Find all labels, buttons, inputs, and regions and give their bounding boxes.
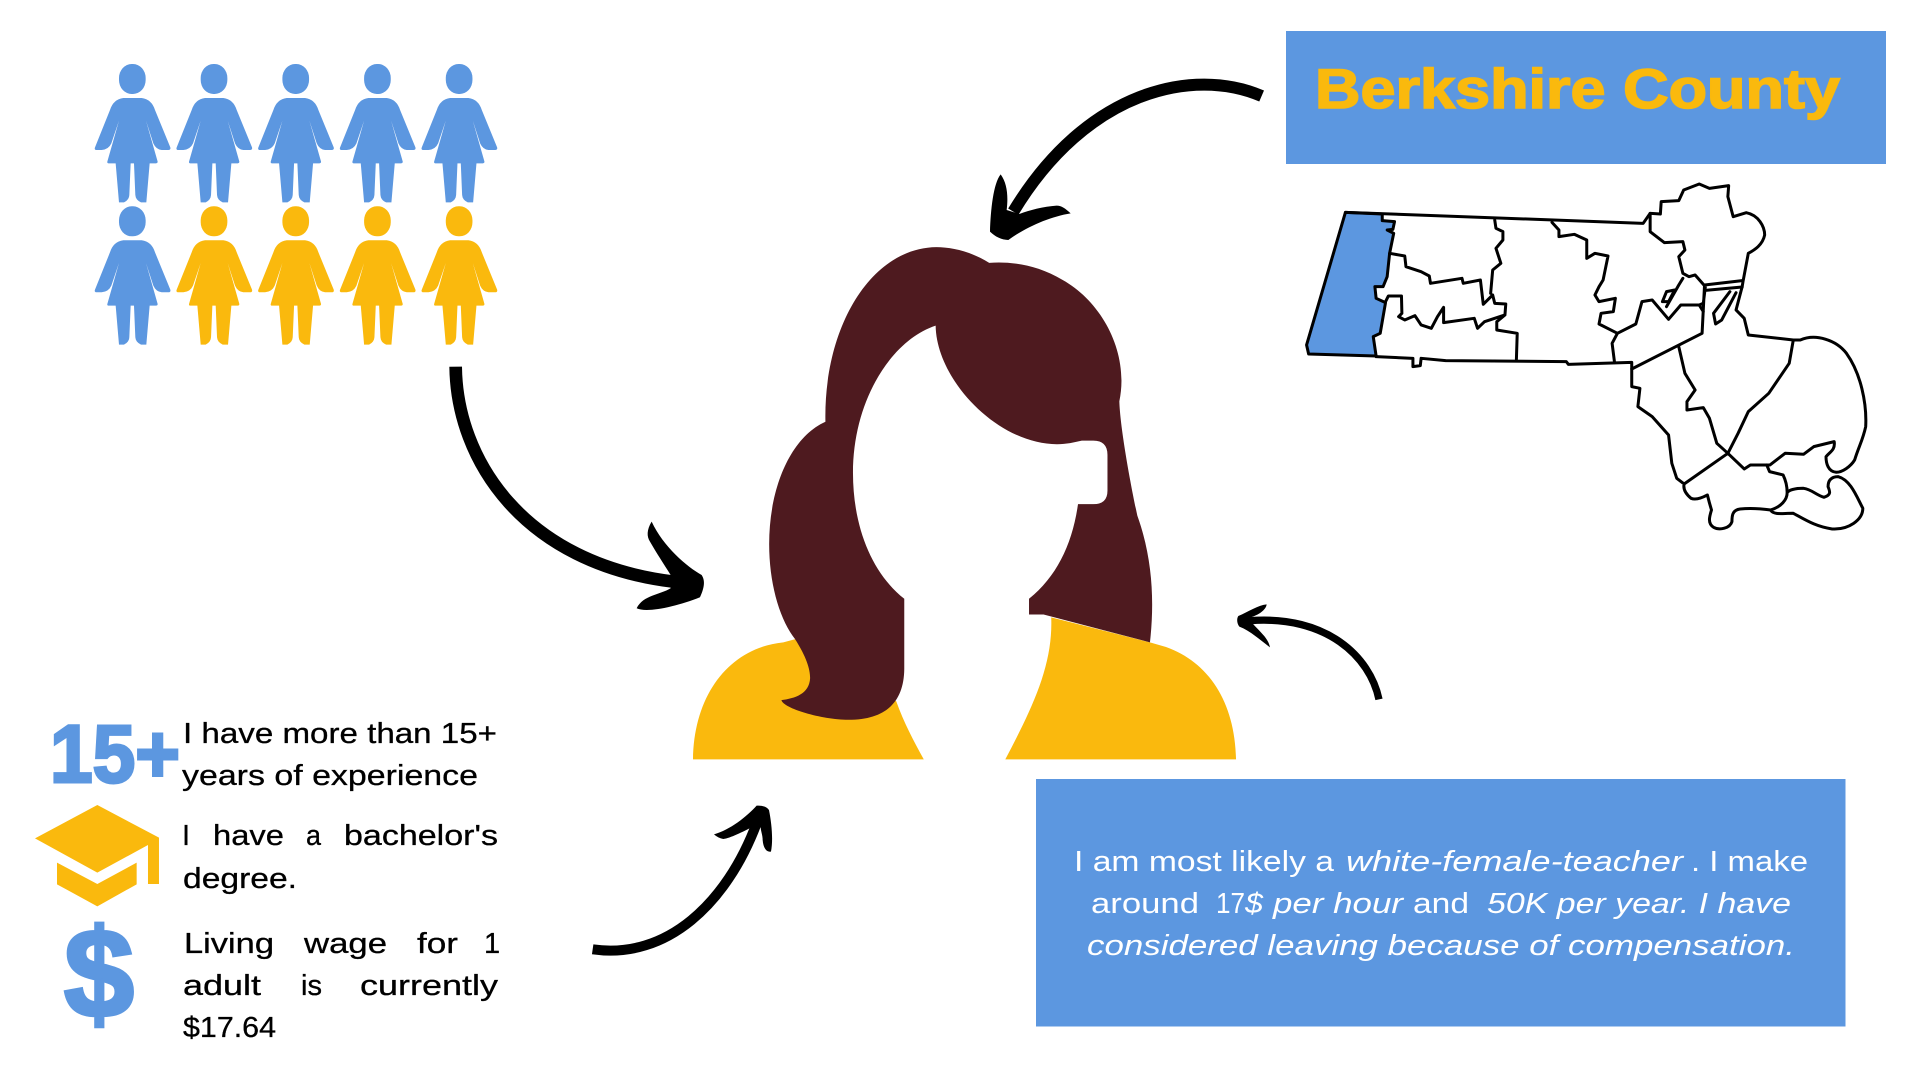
degree text — [182, 820, 498, 895]
heading: Berkshire County — [1315, 57, 1840, 120]
person 10 yellow — [422, 206, 497, 345]
experience text: years of experience — [182, 760, 478, 792]
description text: . I make — [1691, 846, 1808, 878]
map of Massachusetts counties with Berkshire highlighted — [1307, 184, 1866, 529]
county borders — [1386, 213, 1793, 453]
person 2 blue — [176, 64, 252, 202]
Berkshire County highlight — [1307, 212, 1395, 356]
person 4 blue — [340, 64, 416, 202]
description text: I am most likely a — [1074, 846, 1335, 878]
big number: 15+ — [50, 709, 180, 800]
living wage text: wage — [303, 928, 387, 960]
person 6 blue — [95, 206, 170, 345]
pictogram: ten women, six blue and four yellow — [95, 64, 497, 345]
degree text: I — [182, 820, 190, 852]
description text: 17 — [1216, 888, 1245, 920]
arrow: description to woman — [1237, 604, 1379, 699]
shoulder left — [693, 639, 924, 759]
description text — [1074, 846, 1808, 962]
stat: living wage — [64, 903, 500, 1044]
arrow: stats to woman — [593, 806, 772, 951]
person 8 yellow — [258, 206, 334, 345]
description text: around — [1091, 888, 1199, 920]
icon: dollar sign: $ — [64, 903, 134, 1044]
degree text: degree. — [183, 863, 297, 895]
person 7 yellow — [176, 206, 252, 345]
person 1 blue — [95, 64, 170, 202]
description text: per hour — [1272, 888, 1405, 920]
living wage text: adult — [183, 970, 261, 1002]
person 5 blue — [422, 64, 497, 202]
degree text: have — [213, 820, 284, 852]
living wage text: is — [301, 970, 322, 1002]
living wage text: 1 — [484, 928, 500, 960]
description text: 50K per year. I have — [1487, 888, 1791, 920]
living wage text: $17.64 — [183, 1012, 276, 1044]
description text: white-female-teacher — [1346, 846, 1685, 878]
person 9 yellow — [340, 206, 416, 345]
state outline — [1345, 184, 1866, 529]
arrow: Berkshire County to woman — [990, 85, 1262, 240]
panel: Berkshire County title — [1286, 31, 1886, 164]
degree text: bachelor's — [344, 820, 498, 852]
living wage text: Living — [184, 928, 274, 960]
panel: description — [1036, 779, 1846, 1026]
experience text — [182, 718, 497, 792]
stat: 15+ years of experience — [50, 709, 497, 800]
living wage text — [183, 928, 500, 1044]
description text: considered leaving because of compensation. — [1087, 930, 1795, 962]
hair — [769, 247, 1152, 720]
stat: bachelor's degree — [35, 805, 498, 906]
woman silhouette — [693, 247, 1236, 759]
arrow: pictogram to woman — [456, 367, 704, 610]
degree text: a — [306, 820, 322, 852]
living wage text: currently — [360, 970, 499, 1002]
description text: and — [1413, 888, 1469, 920]
experience text: I have more than 15+ — [183, 718, 497, 750]
description text: $ — [1244, 888, 1264, 920]
person 3 blue — [258, 64, 334, 202]
icon: graduation cap — [35, 805, 159, 906]
living wage text: for — [417, 928, 458, 960]
shoulder right — [1005, 617, 1236, 759]
